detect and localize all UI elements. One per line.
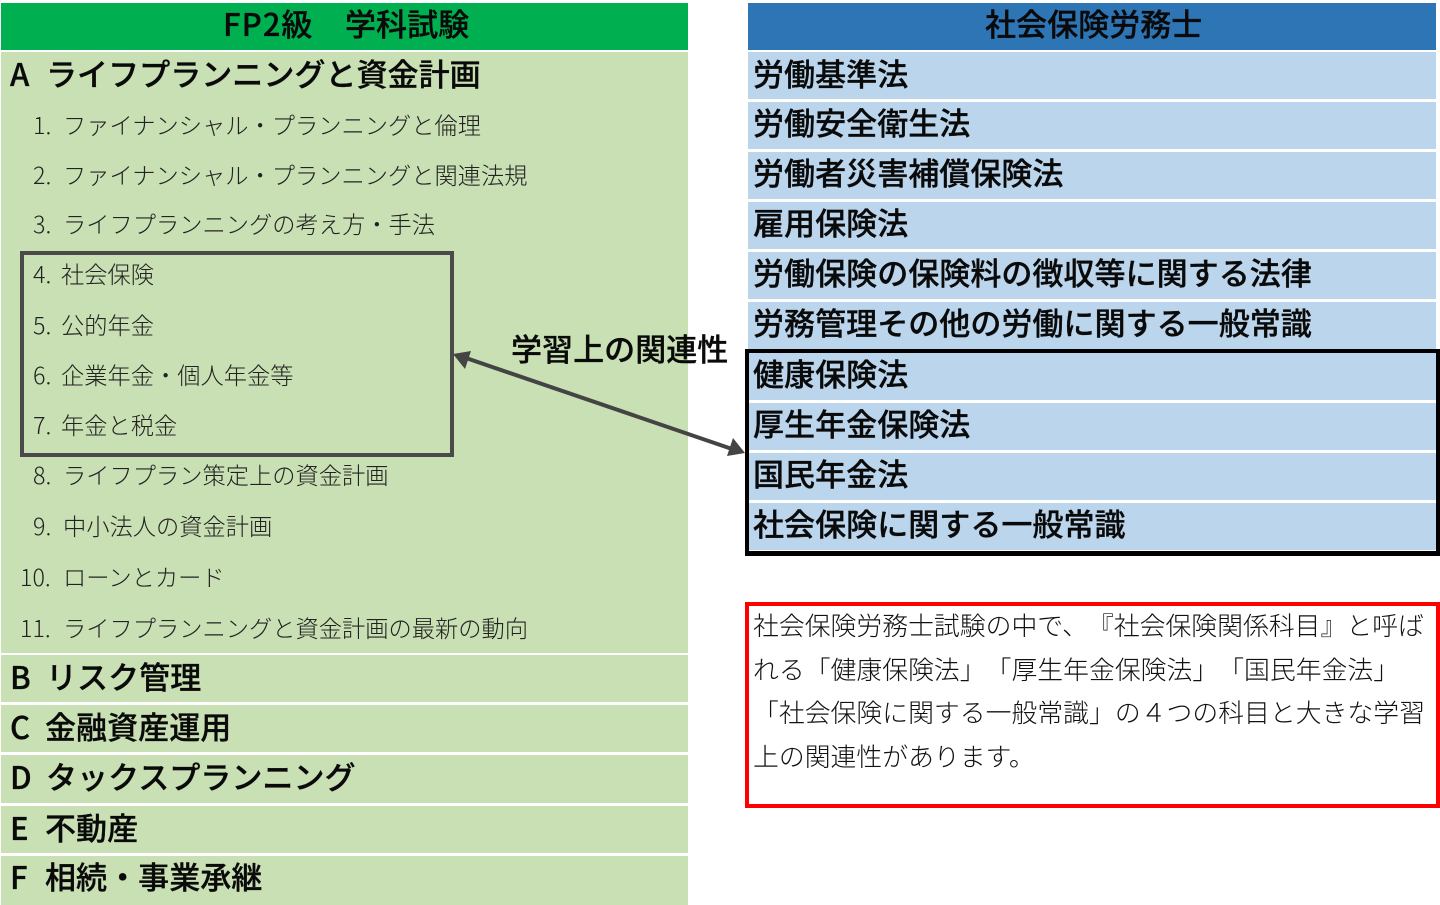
subject: 労働者災害補償保険法: [748, 152, 1436, 199]
item 5: 5.: [33, 307, 51, 341]
callout line 3: 「社会保険に関する一般常識」の４つの科目と大きな学習: [753, 693, 1425, 730]
item 2: [33, 157, 528, 191]
item 10: [20, 559, 225, 593]
item 9: 9.: [33, 508, 51, 542]
text: 社会保険: [61, 256, 154, 290]
item 1: [33, 107, 481, 141]
section A heading: A: [10, 50, 29, 95]
label: 学習上の関連性: 学習上の関連性: [511, 325, 728, 370]
text: 公的年金: [61, 307, 154, 341]
item 2: 2.: [33, 157, 51, 191]
item 8: [33, 457, 389, 491]
text: ファイナンシャル・プランニングと関連法規: [63, 157, 528, 191]
text: ローンとカード: [63, 559, 225, 593]
item 7: 7.: [33, 407, 51, 441]
item 1: 1.: [33, 107, 51, 141]
item 5: [33, 307, 154, 341]
item 6: [33, 357, 294, 391]
callout line 2: れる「健康保険法」「厚生年金保険法」「国民年金法」: [753, 650, 1399, 687]
text: ライフプランニングと資金計画の最新の動向: [63, 610, 528, 644]
text: ファイナンシャル・プランニングと倫理: [63, 107, 481, 141]
section E: [1, 806, 688, 853]
item 4: 4.: [33, 256, 51, 290]
panel: FP2 subjects background: [1, 52, 688, 653]
callout line 1: 社会保険労務士試験の中で、『社会保険関係科目』と呼ば: [753, 606, 1424, 643]
item 11: 11.: [20, 610, 51, 644]
subject: 厚生年金保険法: [748, 403, 1436, 450]
text: ライフプラン策定上の資金計画: [63, 457, 389, 491]
item 4: [33, 256, 154, 290]
item 9: [33, 508, 272, 542]
section F: [1, 856, 688, 905]
subject: 社会保険に関する一般常識: [748, 503, 1436, 550]
highlight box: items 4 to 7: [20, 251, 454, 457]
section A heading: [10, 50, 481, 95]
item 3: 3.: [33, 206, 51, 240]
item 7: [33, 407, 177, 441]
subject: 健康保険法: [748, 352, 1436, 400]
callout line 4: 上の関連性があります。: [753, 737, 1035, 774]
section B: [1, 655, 688, 702]
text: ライフプランニングと資金計画: [46, 50, 481, 95]
subject: 雇用保険法: [748, 202, 1436, 249]
item 3: [33, 206, 435, 240]
text: ライフプランニングの考え方・手法: [63, 206, 435, 240]
heading: FP2級 学科試験: [1, 3, 688, 50]
highlight box: social insurance subjects: [745, 349, 1440, 556]
item 10: 10.: [20, 559, 51, 593]
text: 企業年金・個人年金等: [61, 357, 294, 391]
text: 年金と税金: [61, 407, 177, 441]
item 6: 6.: [33, 357, 51, 391]
subject: 労働基準法: [748, 52, 1436, 99]
subject: 労働安全衛生法: [748, 102, 1436, 149]
section D: [1, 755, 688, 803]
item 11: [20, 610, 528, 644]
arrow: two-way link between FP items and social insurance subjects: [454, 351, 745, 456]
callout: explanation: [745, 602, 1440, 808]
text: 中小法人の資金計画: [63, 508, 272, 542]
subject: 国民年金法: [748, 453, 1436, 500]
heading: 社会保険労務士: [748, 3, 1436, 50]
section C: [1, 705, 688, 752]
item 8: 8.: [33, 457, 51, 491]
